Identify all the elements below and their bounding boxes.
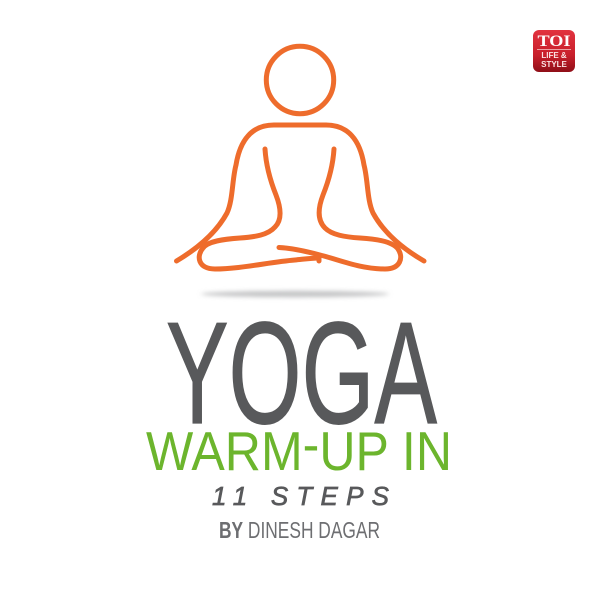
logo: TOI Life & Style: STYLE <box>541 60 568 69</box>
subtitle: WARM-UP IN: WARM <box>146 420 318 482</box>
floor shadow <box>201 291 389 297</box>
logo: TOI Life & Style <box>533 30 575 72</box>
logo: TOI Life & Style: LIFE & <box>541 51 567 60</box>
subtitle: WARM-UP IN: UP IN <box>319 420 452 482</box>
right arm and crossed leg <box>279 149 401 269</box>
byline: BY DINESH DAGAR <box>219 517 380 543</box>
figure shoulders and outer body <box>176 125 424 261</box>
figure head <box>266 46 334 114</box>
title: YOGA: YOGA <box>166 292 437 454</box>
left arm and crossed leg <box>199 149 319 269</box>
icon: meditating figure <box>176 46 424 269</box>
logo: TOI Life & Style: TOI <box>538 33 570 50</box>
subtitle: WARM-UP IN: - <box>303 413 319 475</box>
subtitle: 11 STEPS: 11 STEPS <box>212 481 390 511</box>
